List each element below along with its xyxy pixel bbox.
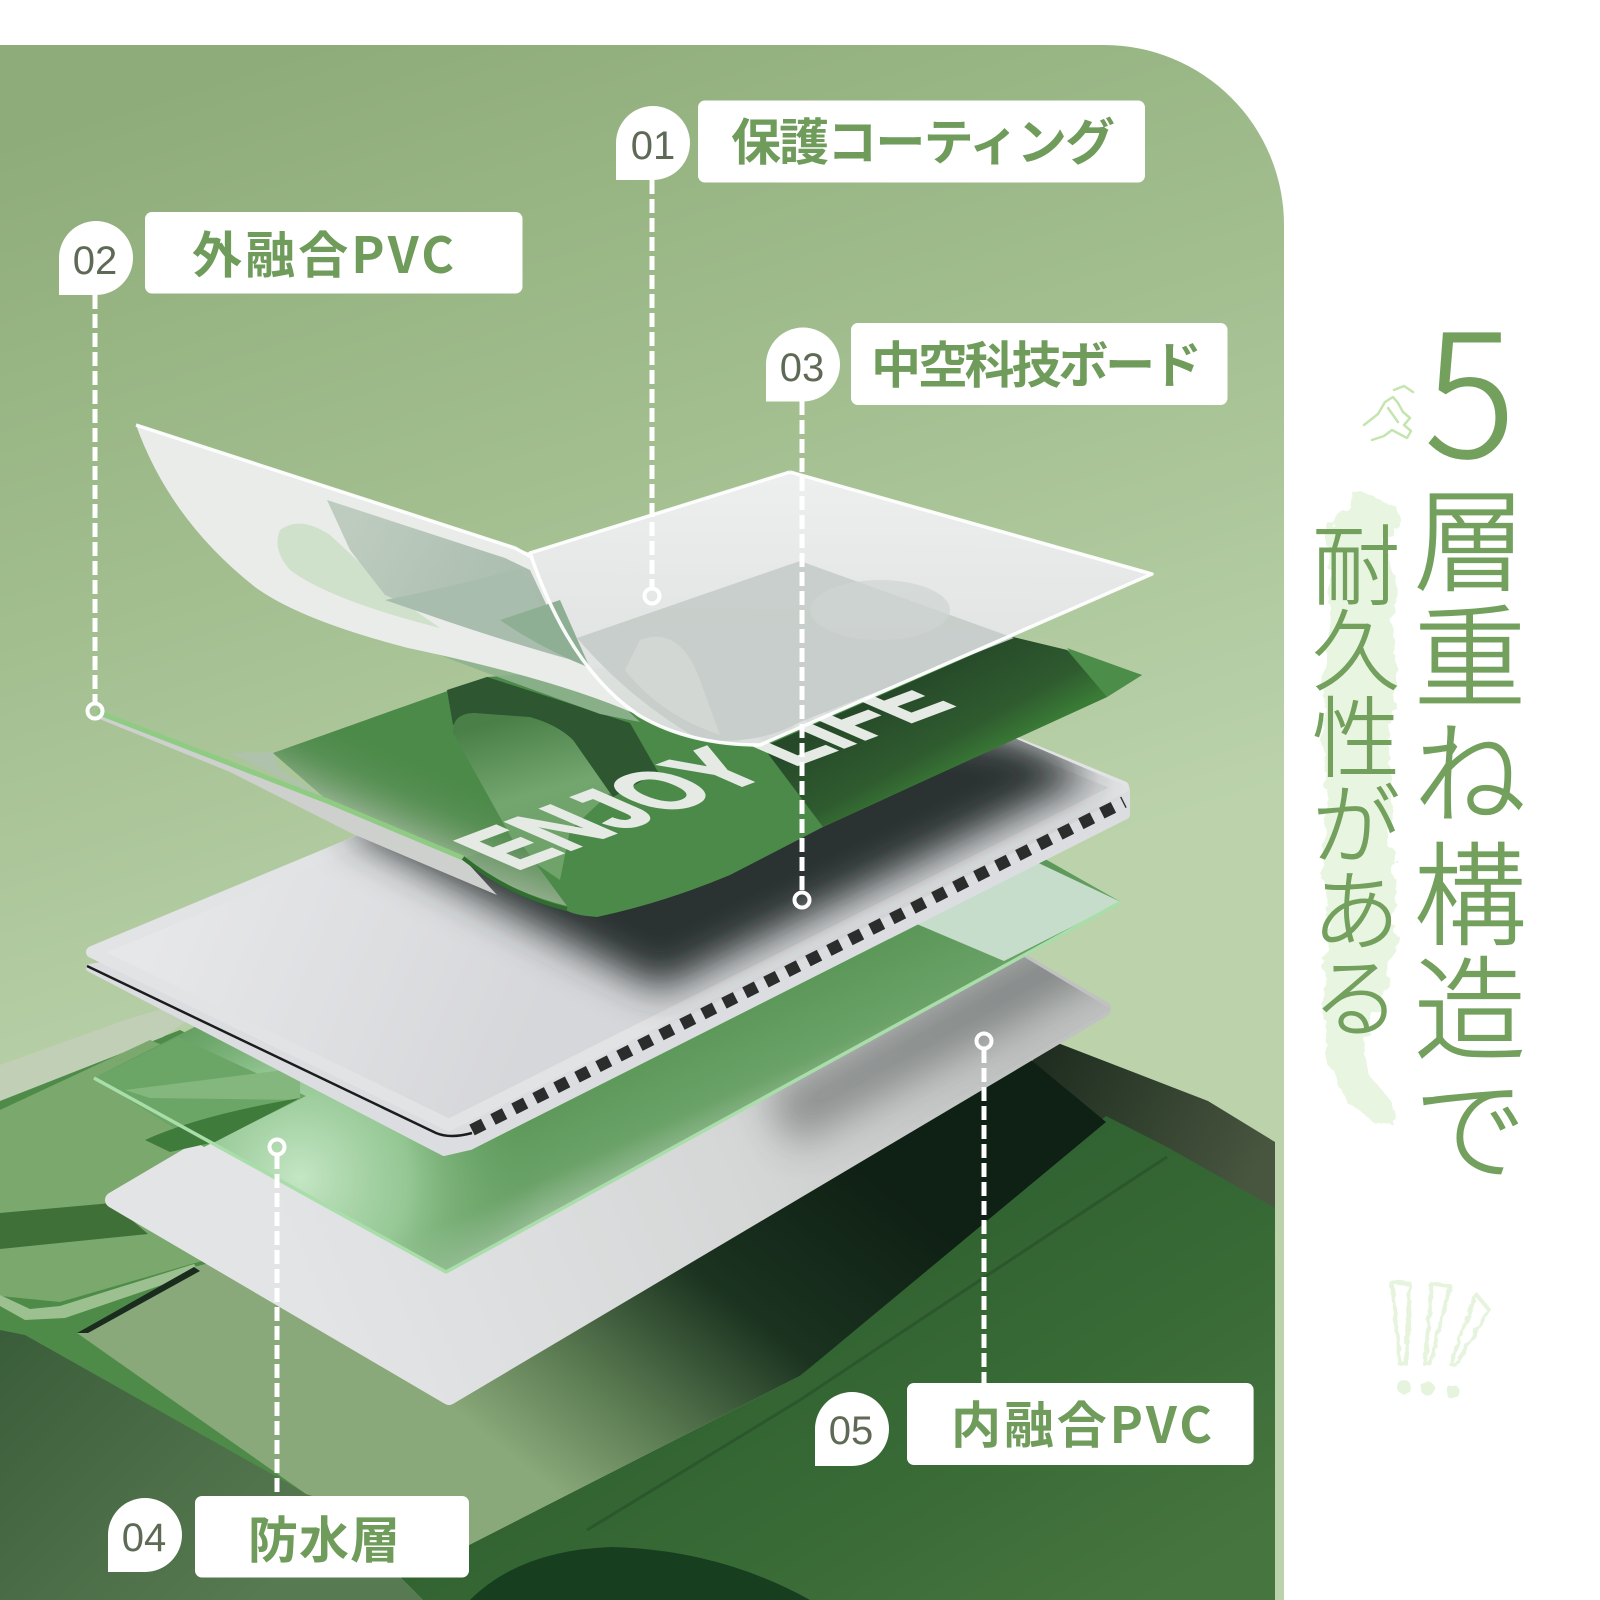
sheet body [273, 637, 1142, 917]
right dark back wall [1020, 1040, 1275, 1210]
layer 04: waterproof film [93, 860, 1122, 1274]
heading: number 5: 5 [1425, 260, 1515, 506]
peel green under edge [413, 640, 640, 722]
layer 05: inner PVC silver panel [105, 956, 1111, 1406]
sheet lower lighter wedge [463, 842, 567, 906]
layer 01: clear protective coating [136, 425, 1152, 745]
film wedge stripes [125, 1068, 300, 1100]
heading: vertical main text: 重 [1414, 569, 1526, 731]
peel inner grey panel [327, 500, 570, 655]
board gap line [87, 966, 472, 1136]
sub heading: vertical text [1312, 497, 1400, 1056]
seen through grey area [577, 561, 1014, 741]
label 02: outer PVC [59, 212, 522, 295]
label 01: protective coating: 保護コーティング [731, 103, 1115, 175]
case left surface [0, 1030, 423, 1600]
clear peeled part [136, 425, 640, 716]
heading: vertical main text: ね [1414, 685, 1526, 847]
label 01: protective coating [616, 100, 1145, 182]
sheet edge [97, 712, 463, 858]
label 01: protective coating: 01 [631, 124, 675, 168]
product base: green case [0, 1004, 1275, 1600]
clear flat part [530, 472, 1152, 745]
film pale right corner [912, 859, 1121, 961]
label 03: hollow board: 03 [780, 346, 824, 390]
pit dark inner edge [77, 1267, 200, 1333]
callout line 05 [976, 1034, 992, 1383]
sub heading: vertical text: あ [1312, 842, 1400, 969]
label 03: hollow board: 中空科技ボード [871, 326, 1202, 398]
right green face [400, 1116, 1275, 1600]
green background panel [0, 45, 1284, 1600]
sheet grey underside [97, 712, 497, 895]
board top face [92, 656, 1123, 1125]
heading: vertical main text: 構 [1414, 807, 1526, 969]
sub heading: vertical text: 耐 [1312, 497, 1400, 624]
film left wedge [94, 1037, 306, 1147]
lower left olive surface [0, 1330, 423, 1600]
label 02: outer PVC: 02 [73, 239, 117, 283]
label 02: outer PVC: 外融合PVC [192, 216, 454, 288]
sub heading: vertical text: 性 [1312, 669, 1400, 796]
sheet right corner [1067, 648, 1142, 697]
sheet pill motif [453, 713, 610, 880]
label 05: inner PVC [815, 1383, 1254, 1466]
heading: vertical main text: 層 [1414, 453, 1526, 615]
callout line 01 [644, 180, 660, 604]
round cut out [470, 1547, 810, 1600]
board lower sheet [90, 790, 1126, 1152]
heading: vertical main text [1414, 453, 1526, 1203]
sub heading: vertical text: 久 [1312, 582, 1400, 709]
sub heading: vertical text: る [1312, 929, 1400, 1056]
rim highlight [0, 1010, 185, 1101]
peel pale green motif [278, 524, 440, 628]
label 03: hollow board [766, 323, 1228, 405]
sub heading: vertical text: が [1312, 756, 1400, 883]
rim light [0, 1264, 200, 1320]
seam line [587, 1157, 1167, 1530]
label 05: inner PVC: 05 [829, 1409, 873, 1453]
sheet right dark panel [763, 637, 1107, 827]
ENJOY LIFE print: ENJOY LIFE [430, 668, 977, 880]
callout line 02 [88, 295, 102, 718]
callout line 04 [270, 1140, 284, 1496]
callout line 03 [794, 401, 810, 908]
sheet pale fold [230, 752, 327, 800]
icon: hand doodle [1364, 386, 1413, 440]
label 04: waterproof layer [108, 1496, 469, 1578]
film glowing edge [94, 902, 1121, 1272]
decorative brush smear behind sub heading [1322, 492, 1402, 1125]
label 04: waterproof layer: 防水層 [248, 1501, 400, 1573]
dark stripe [0, 1203, 148, 1249]
heading: vertical main text: 造 [1414, 921, 1526, 1083]
layer 02: outer PVC printed sheet [97, 637, 1142, 917]
layer 03: hollow board [86, 738, 1130, 1156]
clear edges [136, 425, 1152, 745]
board hollow cells [472, 802, 1124, 1130]
icon: exclamation marks doodle [1392, 1282, 1489, 1397]
inner left tray [0, 1040, 202, 1302]
label 04: waterproof layer: 04 [122, 1516, 166, 1560]
recessed pit [77, 1050, 1106, 1545]
heading: vertical main text: で [1414, 1041, 1526, 1203]
film glow [164, 1027, 498, 1270]
sheet dark band [447, 677, 658, 797]
label 05: inner PVC: 内融合PVC [951, 1386, 1212, 1458]
